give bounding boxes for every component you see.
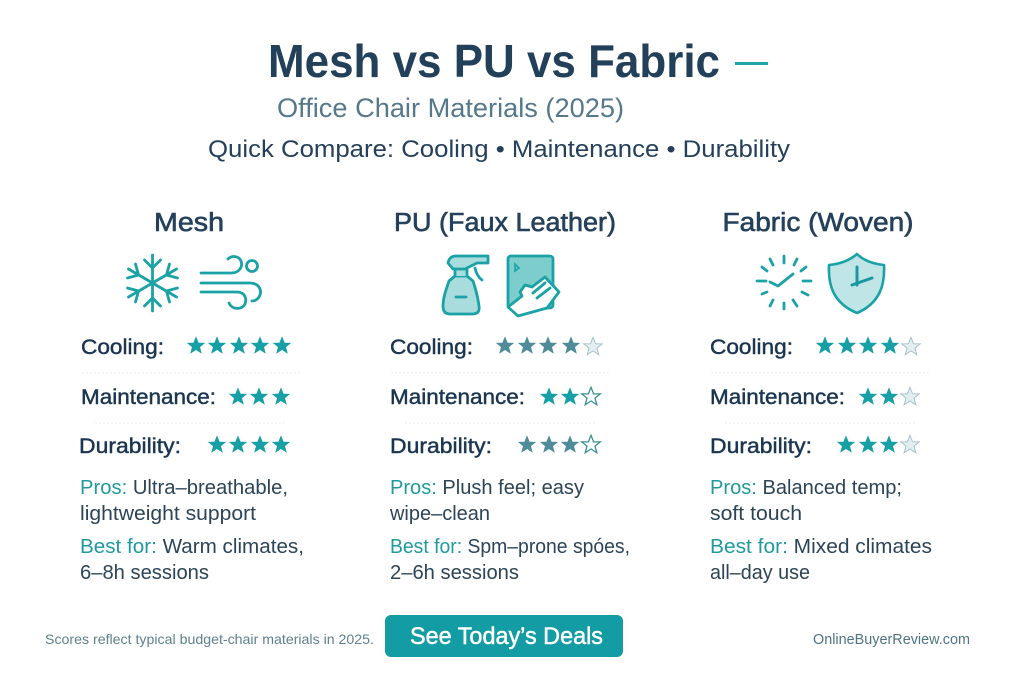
button <box>385 615 623 657</box>
pros: Pros: Balanced temp; <box>710 477 902 499</box>
title: Mesh vs PU vs Fabric <box>268 35 720 87</box>
best for <box>80 536 304 584</box>
subtitle: Office Chair Materials (2025) <box>277 93 624 123</box>
heading: pu: PU (Faux Leather) <box>394 209 616 237</box>
button: See Today’s Deals <box>410 623 603 650</box>
rating: maintenance: Maintenance: <box>81 385 216 409</box>
pros: lightweight support <box>80 503 256 525</box>
rating: cooling <box>81 335 291 359</box>
pros: wipe–clean <box>389 503 490 525</box>
rating: cooling: Cooling: <box>710 335 793 359</box>
icon: wind <box>201 257 261 308</box>
panel: mesh <box>79 209 304 584</box>
rating: cooling <box>710 335 920 359</box>
panel: fabric <box>710 209 932 584</box>
best for: Best for: Warm climates, <box>80 536 304 558</box>
rating: maintenance <box>81 385 290 409</box>
icon: clock <box>757 256 811 309</box>
rating: maintenance <box>710 385 919 409</box>
heading: fabric: Fabric (Woven) <box>722 209 914 237</box>
footnote: Scores reflect typical budget-chair materials in 2025. <box>45 631 374 647</box>
tagline: Quick Compare: Cooling • Maintenance • Durability <box>208 136 791 163</box>
rating: cooling: Cooling: <box>81 335 164 359</box>
pros: Pros: Plush feel; easy <box>390 477 584 499</box>
icon: snowflake <box>128 255 178 311</box>
rating: durability: Durability: <box>710 434 812 458</box>
pros <box>710 477 902 525</box>
rating: durability <box>390 434 600 458</box>
pros <box>80 477 288 525</box>
icon: wiping hand <box>508 256 559 316</box>
best for: Best for: Spm–prone spóes, <box>390 536 630 558</box>
rating: maintenance: Maintenance: <box>390 385 525 409</box>
pros: Pros: Ultra–breathable, <box>80 477 288 499</box>
best for: 2–6h sessions <box>390 562 519 584</box>
rating: durability: Durability: <box>79 434 181 458</box>
rating: durability: Durability: <box>390 434 492 458</box>
heading: mesh: Mesh <box>154 209 224 237</box>
rating: cooling <box>390 335 602 359</box>
best for: all–day use <box>710 562 810 584</box>
panel: pu <box>389 209 630 584</box>
pros <box>389 477 584 525</box>
rating: cooling: Cooling: <box>390 335 473 359</box>
best for: 6–8h sessions <box>80 562 209 584</box>
rating: durability <box>710 434 919 458</box>
rating: maintenance: Maintenance: <box>710 385 845 409</box>
icon: spray bottle <box>443 256 488 314</box>
rating: maintenance <box>390 385 600 409</box>
best for <box>390 536 630 584</box>
site credit: OnlineBuyerReview.com <box>813 632 970 648</box>
icon: shield <box>829 254 884 313</box>
best for: Best for: Mixed climates <box>710 536 932 558</box>
pros: soft touch <box>710 503 802 525</box>
best for <box>710 536 932 584</box>
rating: durability <box>79 434 290 458</box>
